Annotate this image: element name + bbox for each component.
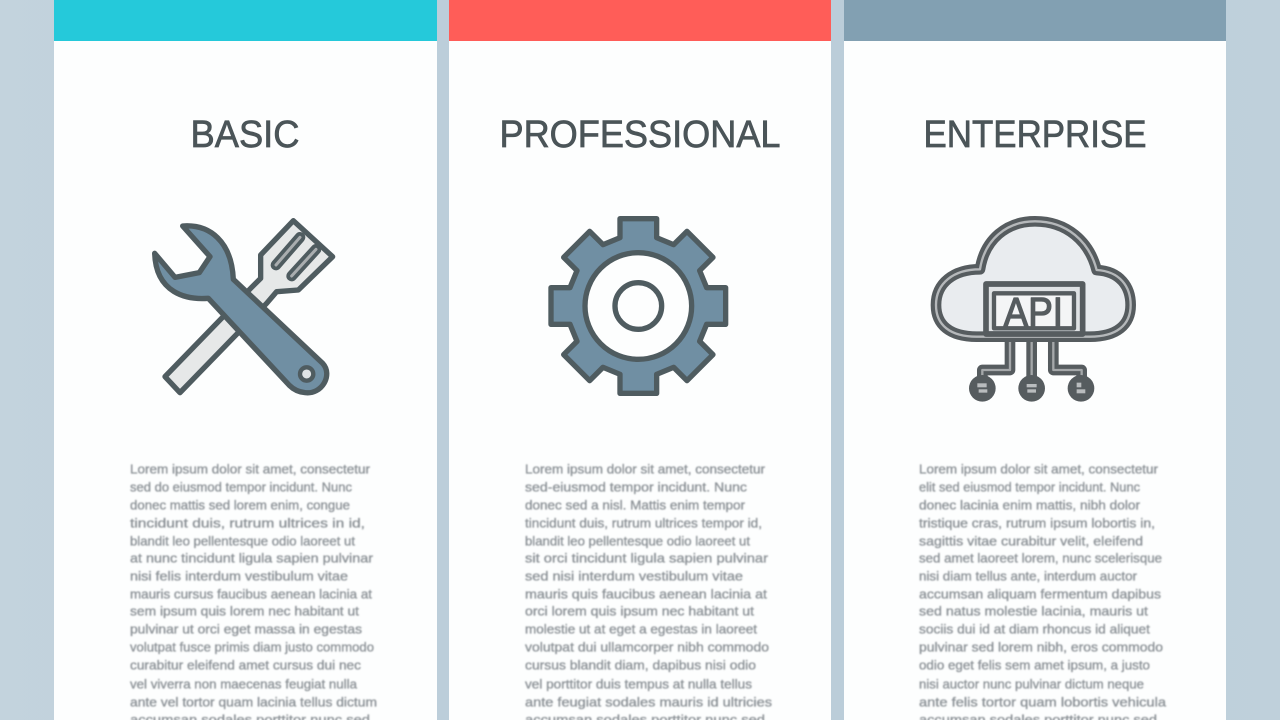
body text: enterprise: tristique cras, rutrum ipsum lobortis in, (919, 516, 1155, 530)
body text: professional: donec sed a nisl. Mattis enim tempor (525, 498, 746, 512)
body text: enterprise: ante felis tortor quam lobortis vehicula (919, 694, 1167, 710)
body text: basic: volutpat fusce primis diam justo commodo (130, 640, 374, 654)
body text: enterprise: sed natus molestie lacinia, mauris ut (919, 604, 1148, 618)
body text: professional: volutpat dui ullamcorper nibh commodo (525, 640, 769, 654)
body text: professional: tincidunt duis, rutrum ultrices tempor id, (525, 516, 762, 530)
body text: basic: pulvinar ut orci eget massa in egestas (130, 622, 363, 636)
body text: professional: mauris quis faucibus aenean lacinia at (525, 586, 767, 602)
panel: enterprise (844, 0, 1226, 720)
icon: gear (551, 219, 726, 393)
body text: enterprise: accumsan aliquam fermentum dapibus (919, 586, 1162, 602)
body text: basic: tincidunt duis, rutrum ultrices in id, (130, 516, 365, 530)
body text: enterprise: elit sed eiusmod tempor incidunt. Nunc (919, 480, 1140, 494)
body text: professional: blandit leo pellentesque odio laoreet ut (525, 534, 750, 548)
body text: professional: sit orci tincidunt ligula sapien pulvinar (525, 550, 769, 566)
heading: professional: PROFESSIONAL (500, 114, 780, 156)
body text: enterprise: sagittis vitae curabitur velit, eleifend (919, 534, 1143, 548)
header band: basic (54, 0, 437, 41)
body text: basic (130, 462, 377, 720)
body text: basic: nisi felis interdum vestibulum vitae (130, 568, 348, 584)
body text: professional: Lorem ipsum dolor sit amet, consectetur (525, 462, 766, 476)
body text: professional: vel porttitor duis tempus at nulla tellus (525, 676, 753, 692)
panel: basic (54, 0, 437, 720)
body text: basic: at nunc tincidunt ligula sapien pulvinar (130, 550, 374, 566)
body text: enterprise: nisi diam tellus ante, interdum auctor (919, 568, 1138, 584)
body text: professional (525, 462, 773, 720)
body text: professional: cursus blandit diam, dapibus nisi odio (525, 658, 756, 672)
icon: API cloud (936, 221, 1131, 402)
body text: basic: sed do eiusmod tempor incidunt. Nunc (130, 480, 352, 494)
icon label: API: API (1004, 289, 1063, 335)
body text: professional: molestie ut at eget a egestas in laoreet (525, 622, 757, 636)
heading: enterprise: ENTERPRISE (924, 114, 1146, 156)
body text: basic: curabitur eleifend amet cursus dui nec (130, 658, 362, 672)
body text: basic: vel viverra non maecenas feugiat nulla (130, 676, 358, 692)
body text: basic: ante vel tortor quam lacinia tellus dictum (130, 694, 377, 710)
body text: enterprise (919, 462, 1167, 720)
body text: enterprise: Lorem ipsum dolor sit amet, consectetur (919, 462, 1159, 476)
body text: enterprise: pulvinar sed lorem nibh, eros commodo (919, 640, 1163, 654)
body text: enterprise: nisi auctor nunc pulvinar dictum neque (919, 676, 1144, 692)
body text: enterprise: sociis dui id at diam rhoncus id aliquet (919, 622, 1150, 636)
body text: basic: donec mattis sed lorem enim, congue (130, 498, 350, 512)
panel: professional (449, 0, 831, 720)
body text: enterprise: sed amet laoreet lorem, nunc scelerisque (919, 550, 1162, 566)
body text: enterprise: odio eget felis sem amet ipsum, a justo (919, 658, 1150, 672)
body text: basic: mauris cursus faucibus aenean lacinia at (130, 586, 372, 602)
body text: professional: orci lorem quis ipsum nec habitant ut (525, 604, 754, 618)
header band: enterprise (844, 0, 1226, 41)
body text: basic: blandit leo pellentesque odio laoreet ut (130, 534, 355, 548)
body text: professional: sed-eiusmod tempor incidunt. Nunc (525, 480, 748, 494)
icon: crossed wrench and spatula (155, 221, 333, 393)
body text: enterprise: donec lacinia enim mattis, nibh dolor (919, 498, 1141, 512)
header band: professional (449, 0, 831, 41)
body text: basic: Lorem ipsum dolor sit amet, consectetur (130, 462, 371, 476)
body text: professional: sed nisi interdum vestibulum vitae (525, 568, 743, 584)
body text: professional: ante feugiat sodales mauris id ultricies (525, 694, 773, 710)
heading: basic: BASIC (190, 114, 300, 156)
body text: basic: sem ipsum quis lorem nec habitant ut (130, 604, 359, 618)
